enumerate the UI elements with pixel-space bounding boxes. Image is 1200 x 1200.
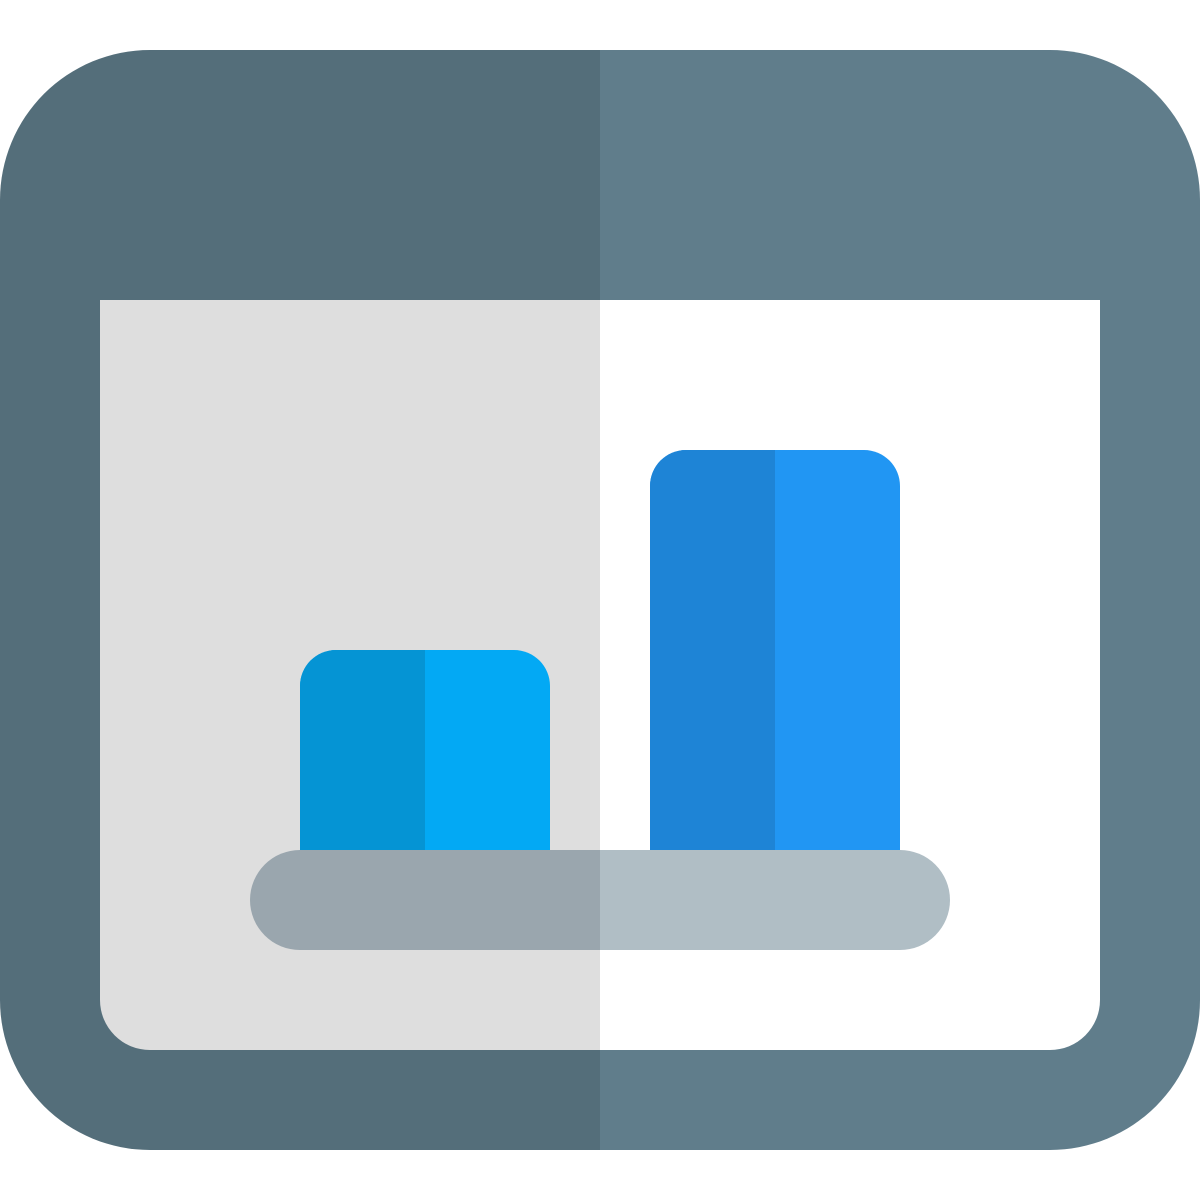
short bar — [300, 650, 550, 860]
window content area — [100, 300, 1100, 1050]
chart baseline — [250, 850, 950, 950]
tall bar — [650, 450, 900, 860]
